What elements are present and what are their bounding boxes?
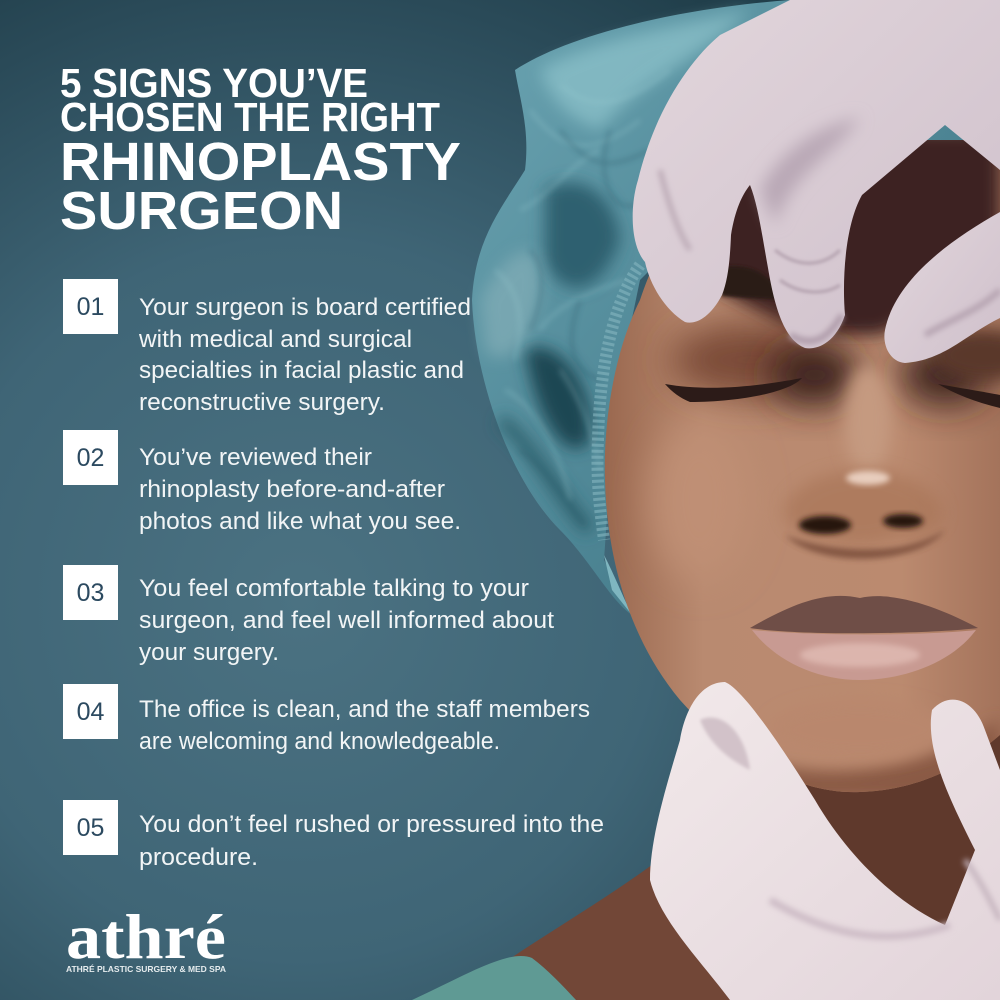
item 01	[63, 279, 471, 416]
logo: athré	[66, 901, 226, 972]
title: CHOSEN THE RIGHT	[60, 94, 440, 140]
item 03 text: surgeon, and feel well informed about	[139, 607, 554, 634]
logo: ATHRÉ PLASTIC SURGERY & MED SPA	[66, 964, 226, 974]
item 01 text: reconstructive surgery.	[139, 389, 385, 416]
lips	[750, 596, 978, 680]
photo: patient with gloved hands	[412, 0, 1000, 1000]
number badge 02: 02	[77, 444, 104, 472]
item 05 text: procedure.	[139, 844, 258, 871]
number badge 01: 01	[77, 293, 104, 321]
item 03	[63, 565, 554, 666]
eyebrow	[718, 266, 784, 300]
number badge 02	[63, 430, 118, 485]
eye socket shadows	[670, 322, 830, 398]
top gloved hand	[633, 0, 1000, 363]
item 01 text	[138, 294, 471, 416]
closed eye left	[665, 378, 802, 402]
title	[60, 60, 461, 241]
item 02 text	[139, 444, 461, 535]
item 02 text: rhinoplasty before-and-after	[139, 476, 445, 503]
forehead shadow	[700, 130, 1000, 335]
item 02	[63, 430, 461, 535]
face	[605, 130, 1000, 800]
item 01 text: with medical and surgical	[138, 326, 412, 353]
bottom gloved hand	[650, 682, 1000, 1000]
cheek tone	[642, 436, 696, 563]
item 05 text	[139, 811, 604, 871]
title: RHINOPLASTY	[60, 132, 461, 192]
item 03 text: your surgery.	[139, 639, 279, 666]
number badge 04: 04	[77, 698, 104, 726]
item 03 text	[139, 575, 554, 666]
scrubs	[412, 956, 576, 1000]
item 03 text: You feel comfortable talking to your	[139, 575, 529, 602]
chin shading	[790, 722, 1000, 792]
title: SURGEON	[60, 181, 343, 241]
nose bridge highlight	[844, 365, 892, 475]
number badge 05: 05	[77, 814, 104, 842]
title: 5 SIGNS YOU’VE	[60, 60, 368, 106]
neck	[790, 720, 1000, 1000]
nose	[784, 470, 945, 559]
third finger	[884, 212, 1000, 363]
item 05 text: You don’t feel rushed or pressured into the	[139, 811, 604, 838]
closed eye right	[938, 384, 1000, 408]
item 01 text: specialties in facial plastic and	[139, 357, 464, 384]
item 04 text	[139, 696, 590, 755]
item 04	[63, 684, 590, 755]
number badge 03	[63, 565, 118, 620]
item 05	[63, 800, 604, 871]
surgical cap	[472, 0, 1000, 615]
item 01 text: Your surgeon is board certified	[139, 294, 471, 321]
shoulder	[505, 760, 1000, 1000]
item 02 text: You’ve reviewed their	[139, 444, 372, 471]
number badge 04	[63, 684, 118, 739]
number badge 01	[63, 279, 118, 334]
item 04 text: are welcoming and knowledgeable.	[139, 728, 500, 755]
item 04 text: The office is clean, and the staff members	[139, 696, 590, 723]
under-lip tone	[912, 744, 934, 757]
item 02 text: photos and like what you see.	[139, 508, 461, 535]
number badge 05	[63, 800, 118, 855]
number badge 03: 03	[77, 579, 104, 607]
